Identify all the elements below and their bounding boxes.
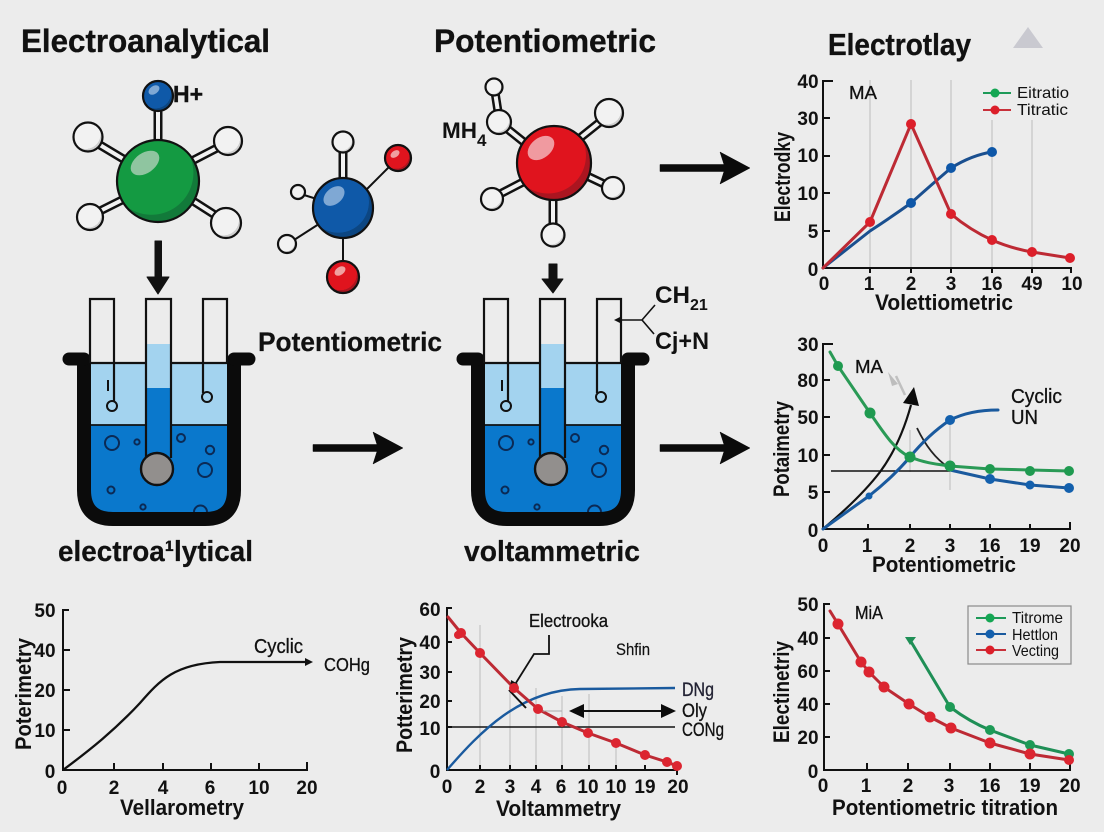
molecule: red centre with MH4 [442, 78, 624, 246]
chart: middle right Potaimetry vs Potentiometric: 16 [979, 536, 1001, 557]
molecule: red centre with MH4: MH [442, 118, 477, 143]
arrow: into beaker 1 [147, 241, 169, 294]
label: CH21 / Cj+N with bracket: Cj+N [655, 328, 709, 355]
chart: middle right Potaimetry vs Potentiometric: 5 [808, 483, 819, 504]
arrow: right middle [660, 432, 750, 464]
chart: bottom left Poterimetry vs Vellarometry: 4 [158, 778, 169, 799]
chart: middle right Potaimetry vs Potentiometric: 3 [945, 536, 955, 557]
chart: top right Electrodky vs Volettiometric: 3 [946, 274, 956, 295]
chart: middle right Potaimetry vs Potentiometric: Cyclic [1011, 386, 1062, 408]
chart: bottom right Electinetriy vs Potentiometric titration: 2 [903, 776, 913, 797]
chart: middle right Potaimetry vs Potentiometric: 20 [1059, 536, 1081, 557]
chart: bottom middle Potterimetry vs Voltammetry: 0 [442, 777, 452, 798]
chart: bottom right Electinetriy vs Potentiometric titration: 19 [1019, 776, 1041, 797]
chart: bottom right Electinetriy vs Potentiometric titration: 40 [797, 695, 819, 716]
chart: bottom middle Potterimetry vs Voltammetry: 30 [419, 663, 441, 684]
molecule: blue centre [278, 132, 411, 293]
chart: bottom left Poterimetry vs Vellarometry [11, 601, 370, 820]
chart: bottom left Poterimetry vs Vellarometry: 2 [109, 778, 119, 799]
chart: bottom middle Potterimetry vs Voltammetry: 0 [430, 762, 440, 783]
chart: bottom right Electinetriy vs Potentiometric titration: 20 [797, 728, 819, 749]
chart: bottom middle Potterimetry vs Voltammetry: 2 [475, 777, 485, 798]
chart: bottom left Poterimetry vs Vellarometry: 10 [248, 778, 270, 799]
chart: bottom right Electinetriy vs Potentiometric titration: 20 [1059, 776, 1081, 797]
legend: Titrome / Hettlon / Vecting: Vecting [1012, 643, 1059, 660]
chart: bottom middle Potterimetry vs Voltammetry: Electrooka [529, 611, 609, 631]
chart: bottom middle Potterimetry vs Voltammetry: 4 [531, 777, 542, 798]
chart: bottom right Electinetriy vs Potentiometric titration: 0 [818, 776, 828, 797]
beaker 2 electrochemical cell [463, 299, 643, 519]
chart: bottom left Poterimetry vs Vellarometry: Vellarometry [120, 795, 245, 820]
chart: bottom right Electinetriy vs Potentiometric titration: 1 [861, 776, 872, 797]
chart: bottom middle Potterimetry vs Voltammetry: 10 [605, 777, 627, 798]
chart: bottom middle Potterimetry vs Voltammetry: 40 [419, 633, 441, 654]
chart: middle right Potaimetry vs Potentiometric: 0 [818, 536, 828, 557]
arrow: middle [313, 432, 403, 464]
chart: middle right Potaimetry vs Potentiometric: Potaimetry [769, 400, 794, 497]
chart: middle right Potaimetry vs Potentiometric [769, 335, 1081, 577]
chart: top right Electrodky vs Volettiometric: 2 [906, 274, 916, 295]
molecule: red centre with MH4: 4 [477, 131, 487, 150]
title: Potentiometric: Potentiometric [434, 23, 656, 59]
chart: bottom left Poterimetry vs Vellarometry: Poterimetry [11, 637, 36, 750]
label: electroalytical: electroa¹lytical [58, 536, 253, 568]
chart: top right Electrodky vs Volettiometric: 0 [819, 274, 829, 295]
chart: middle right Potaimetry vs Potentiometric: 50 [797, 408, 819, 429]
chart: bottom left Poterimetry vs Vellarometry: COHg [324, 655, 370, 675]
chart: bottom middle Potterimetry vs Voltammetry: 10 [419, 719, 441, 740]
chart: bottom right Electinetriy vs Potentiometric titration: 16 [979, 776, 1001, 797]
chart: bottom middle Potterimetry vs Voltammetry [392, 600, 724, 821]
arrow: into beaker 2 [542, 264, 563, 293]
chart: middle right Potaimetry vs Potentiometric: 1 [862, 536, 873, 557]
chart: bottom left Poterimetry vs Vellarometry: 20 [34, 681, 56, 702]
legend: Titrome / Hettlon / Vecting [968, 606, 1071, 664]
chart: bottom middle Potterimetry vs Voltammetry: 6 [556, 777, 566, 798]
chart: bottom left Poterimetry vs Vellarometry: 50 [34, 601, 56, 622]
chart: bottom right Electinetriy vs Potentiometric titration: MiA [855, 603, 883, 623]
chart: middle right Potaimetry vs Potentiometric: 0 [808, 521, 818, 542]
chart: bottom right Electinetriy vs Potentiometric titration: 40 [797, 629, 819, 650]
icon: grey triangle [1013, 27, 1043, 48]
label: CH21 / Cj+N with bracket: 21 [690, 297, 708, 314]
chart: top right Electrodky vs Volettiometric [770, 72, 1083, 315]
chart: bottom middle Potterimetry vs Voltammetry: 60 [419, 600, 441, 621]
beaker 1 electrochemical cell [69, 299, 249, 519]
label: CH21 / Cj+N with bracket: CH [655, 282, 690, 309]
chart: top right Electrodky vs Volettiometric: 49 [1021, 274, 1043, 295]
arrow: top right [660, 152, 750, 184]
chart: middle right Potaimetry vs Potentiometric: MA [855, 357, 883, 377]
legend: Titrome / Hettlon / Vecting: Titrome [1012, 610, 1063, 627]
chart: top right Electrodky vs Volettiometric: MA [849, 83, 877, 103]
chart: bottom left Poterimetry vs Vellarometry: 40 [34, 641, 56, 662]
chart: bottom middle Potterimetry vs Voltammetry: CONg [682, 720, 724, 741]
legend: Eitratio / Titratic: Eitratio [1017, 85, 1069, 102]
chart: bottom middle Potterimetry vs Voltammetry: 3 [505, 777, 515, 798]
label: CH21 / Cj+N with bracket [614, 282, 709, 355]
chart: bottom left Poterimetry vs Vellarometry: 0 [45, 762, 55, 783]
title: Electroanalytical: Electroanalytical [21, 23, 270, 59]
chart: top right Electrodky vs Volettiometric: Electrodky [770, 131, 795, 222]
chart: bottom right Electinetriy vs Potentiometric titration: Electinetriy [769, 640, 794, 743]
title: Electrotday: Electrotlay [828, 27, 972, 62]
chart: bottom left Poterimetry vs Vellarometry: Cyclic [254, 636, 303, 658]
chart: bottom right Electinetriy vs Potentiometric titration: 3 [944, 776, 954, 797]
chart: bottom right Electinetriy vs Potentiometric titration [769, 595, 1081, 820]
chart: bottom middle Potterimetry vs Voltammetry: DNg [682, 680, 714, 701]
chart: bottom right Electinetriy vs Potentiometric titration: 0 [808, 762, 818, 783]
chart: bottom left Poterimetry vs Vellarometry: 6 [205, 778, 215, 799]
chart: bottom middle Potterimetry vs Voltammetry: Voltammetry [496, 796, 622, 821]
chart: bottom left Poterimetry vs Vellarometry: 0 [57, 778, 67, 799]
chart: middle right Potaimetry vs Potentiometric: 19 [1019, 536, 1041, 557]
chart: middle right Potaimetry vs Potentiometric: 30 [797, 335, 819, 356]
molecule: green centre with H+ [74, 81, 242, 238]
chart: top right Electrodky vs Volettiometric: 10 [797, 184, 819, 205]
chart: middle right Potaimetry vs Potentiometric: UN [1011, 407, 1038, 429]
chart: top right Electrodky vs Volettiometric: Volettiometric [875, 290, 1013, 315]
chart: top right Electrodky vs Volettiometric: 30 [797, 109, 819, 130]
chart: bottom middle Potterimetry vs Voltammetry: 20 [667, 777, 689, 798]
chart: top right Electrodky vs Volettiometric: 16 [981, 274, 1003, 295]
chart: bottom middle Potterimetry vs Voltammetry: Oly [682, 701, 707, 722]
chart: bottom middle Potterimetry vs Voltammetry: Shfin [616, 640, 650, 659]
legend: Titrome / Hettlon / Vecting: Hettlon [1012, 627, 1058, 644]
chart: top right Electrodky vs Volettiometric: 40 [797, 72, 819, 93]
chart: bottom middle Potterimetry vs Voltammetry: Potterimetry [392, 636, 417, 753]
chart: middle right Potaimetry vs Potentiometric: Potentiometric [872, 552, 1016, 577]
chart: top right Electrodky vs Volettiometric: 5 [808, 222, 819, 243]
label: Potentiometric: Potentiometric [258, 327, 442, 357]
chart: top right Electrodky vs Volettiometric: 0 [808, 260, 818, 281]
chart: top right Electrodky vs Volettiometric: 1 [864, 274, 875, 295]
molecule: green centre with H+: H+ [173, 81, 203, 107]
chart: bottom right Electinetriy vs Potentiometric titration: 50 [797, 595, 819, 616]
chart: middle right Potaimetry vs Potentiometric: 80 [797, 371, 819, 392]
chart: middle right Potaimetry vs Potentiometric: 10 [797, 446, 819, 467]
label: voltammetric: voltammetric [464, 536, 640, 568]
legend: Eitratio / Titratic [983, 85, 1069, 119]
chart: bottom middle Potterimetry vs Voltammetry: 10 [577, 777, 599, 798]
chart: bottom middle Potterimetry vs Voltammetry: 20 [419, 692, 441, 713]
chart: bottom middle Potterimetry vs Voltammetry: 19 [634, 777, 656, 798]
chart: top right Electrodky vs Volettiometric: 10 [797, 146, 819, 167]
chart: top right Electrodky vs Volettiometric: 10 [1061, 274, 1083, 295]
chart: bottom right Electinetriy vs Potentiometric titration: 60 [797, 662, 819, 683]
legend: Eitratio / Titratic: Titratic [1017, 102, 1068, 119]
chart: bottom right Electinetriy vs Potentiometric titration: Potentiometric titration [832, 795, 1058, 820]
chart: bottom left Poterimetry vs Vellarometry: 10 [34, 721, 56, 742]
chart: middle right Potaimetry vs Potentiometric: 2 [905, 536, 915, 557]
chart: bottom left Poterimetry vs Vellarometry: 20 [296, 778, 318, 799]
